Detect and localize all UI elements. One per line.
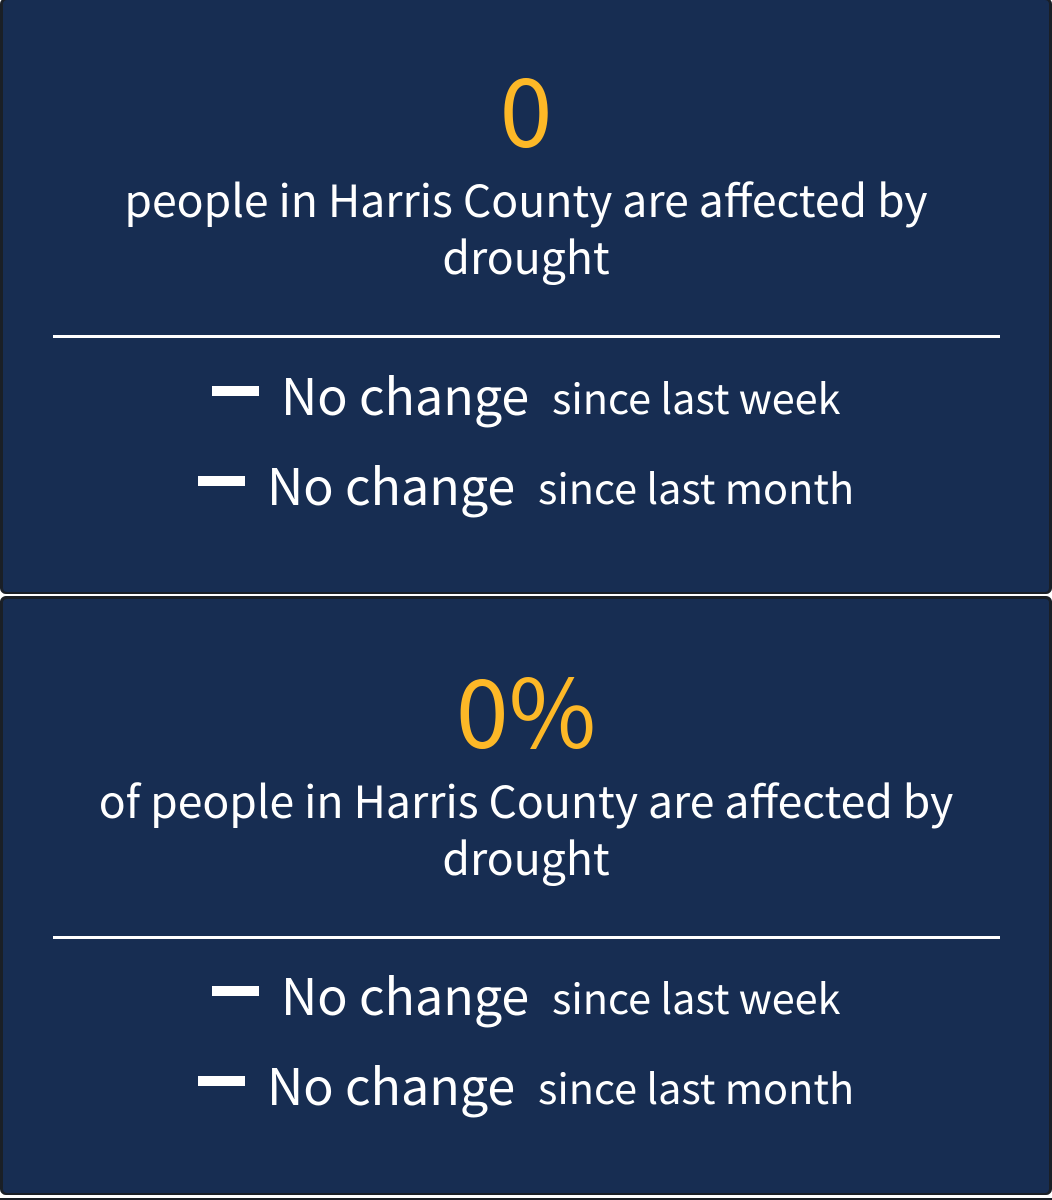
text: no change since last month: No change [267,1048,515,1120]
icon: no change month [198,1076,245,1086]
label: since last week: since last week [552,366,840,426]
label: since last month: since last month [538,1056,854,1116]
panel: percent affected [0,596,1052,1195]
headline number: 0%: 0% [456,639,596,776]
icon: no change week [212,386,259,396]
text: no change since last week: No change [281,958,529,1030]
description: percent affected: of people in Harris County are affected by [99,766,953,831]
headline number: 0: 0 [500,38,552,175]
label: since last week: since last week [552,966,840,1026]
description: people affected: people in Harris County are affected by [124,165,928,230]
text: no change since last week: No change [281,358,529,430]
description continuation: drought [442,222,610,287]
icon: no change month [198,476,245,486]
label: since last month: since last month [538,456,854,516]
text: no change since last month: No change [267,448,515,520]
icon: no change week [212,986,259,996]
panel: people affected [0,0,1052,594]
description continuation: drought [442,823,610,888]
